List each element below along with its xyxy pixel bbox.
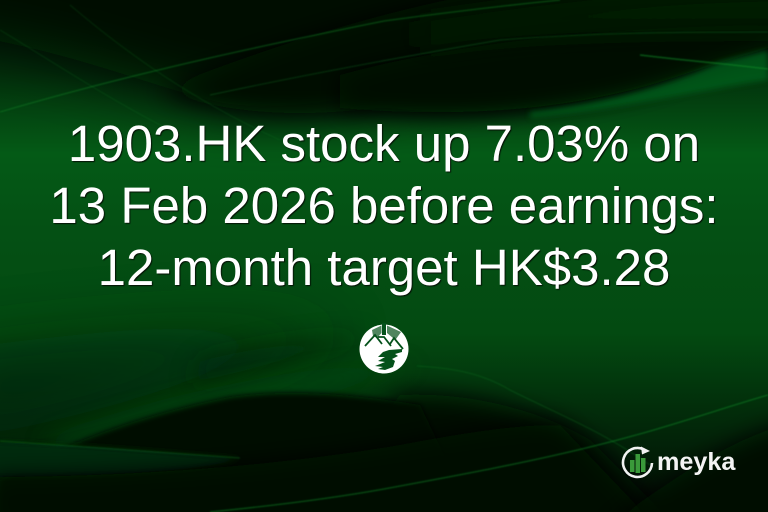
wordmark: meyka	[657, 448, 735, 476]
icon: company logo with mountains and river	[360, 323, 408, 374]
title	[49, 115, 719, 297]
title: 12-month target HK$3.28	[98, 239, 670, 296]
title: 13 Feb 2026 before earnings:	[49, 177, 719, 234]
icon: ring with bars	[622, 446, 654, 478]
title: 1903.HK stock up 7.03% on	[68, 115, 700, 172]
brand logo: meyka	[622, 446, 736, 478]
